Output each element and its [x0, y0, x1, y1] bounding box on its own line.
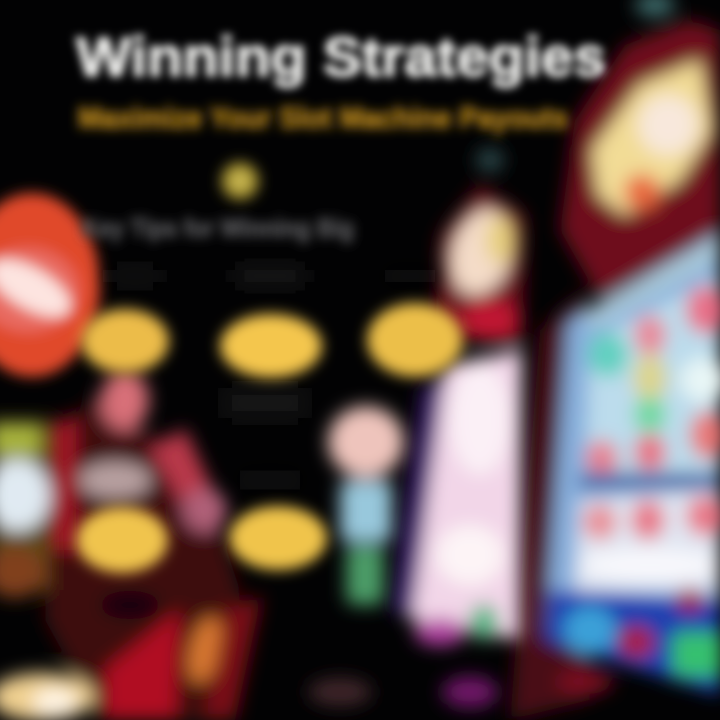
callout labels — [110, 268, 435, 490]
screen: right machine — [545, 232, 720, 695]
light: top of centre machine — [440, 201, 524, 303]
icon: red sign circle — [0, 193, 100, 377]
lower left red cabinets — [0, 370, 262, 720]
heading: title: Winning Strategies — [76, 25, 606, 88]
column: small pink and teal machine — [308, 406, 404, 706]
light: top of right machine — [592, 60, 712, 215]
callout pills — [76, 303, 463, 573]
section heading: Key Tips for Winning Big — [82, 213, 354, 243]
left edge machine — [0, 420, 48, 590]
slot machine: centre right — [392, 148, 525, 708]
icon: gold emblem — [221, 162, 259, 200]
slot machine: right large — [510, 0, 720, 720]
heading: subtitle: Maximize Your Slot Machine Payouts — [78, 100, 568, 135]
